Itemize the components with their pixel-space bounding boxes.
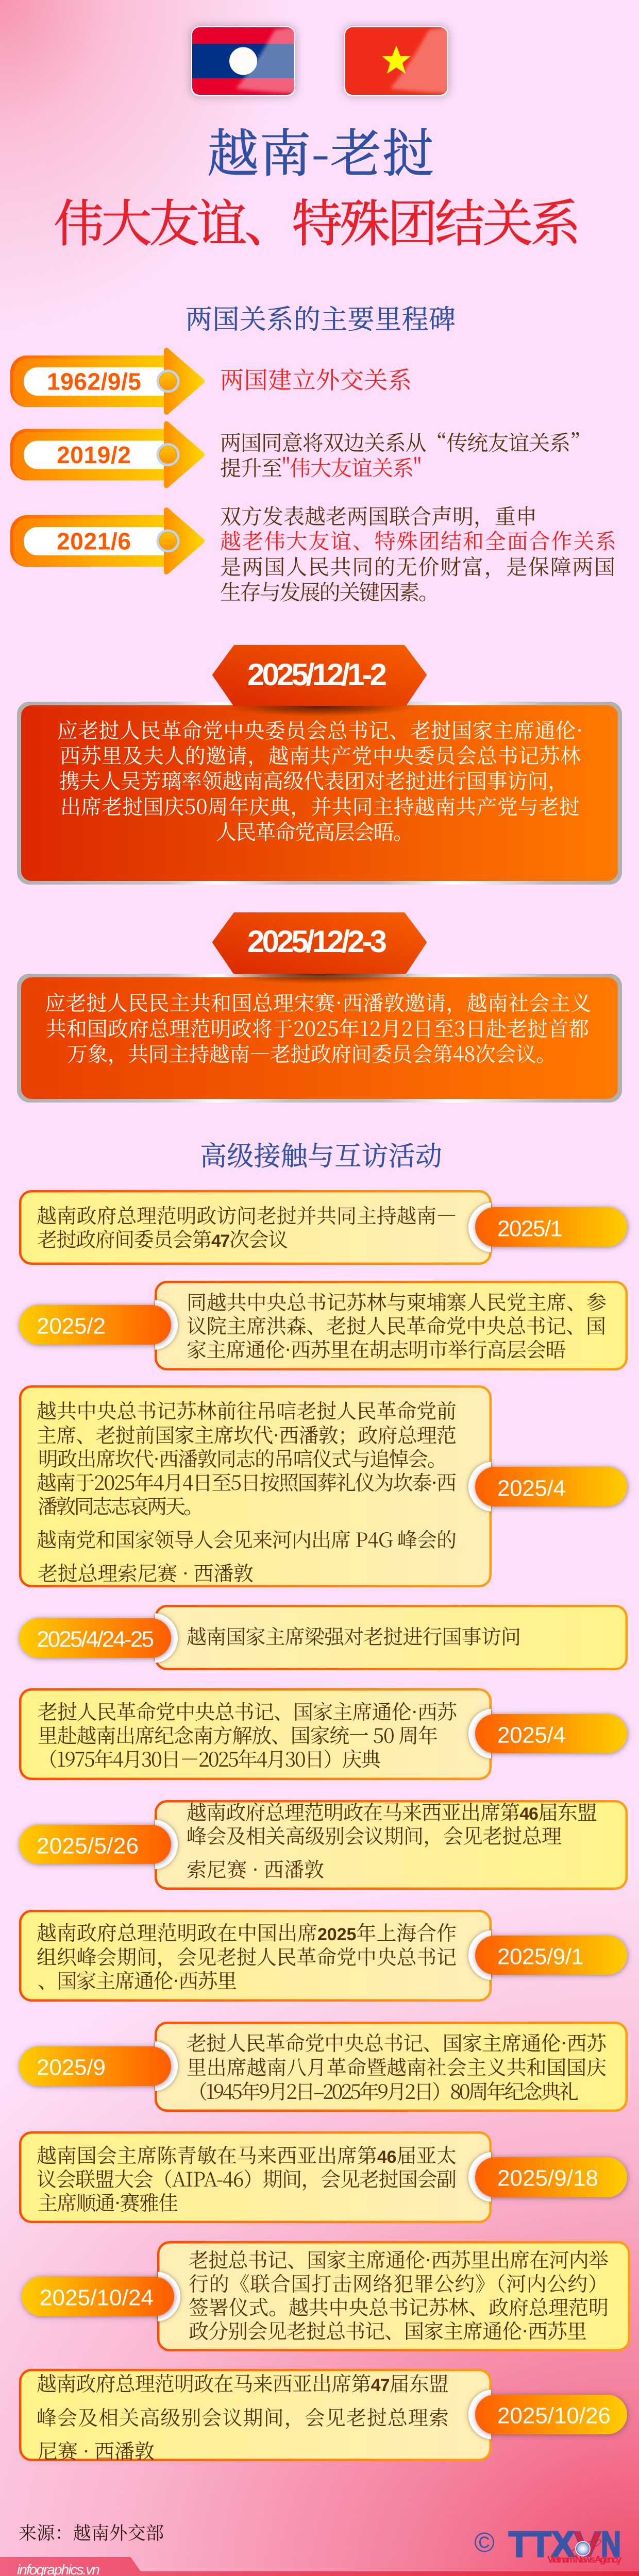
logo: TTXVN Vietnam News Agency: TTX	[509, 2524, 575, 2564]
event card: 2025/10/24: 行的《联合国打击网络犯罪公约》（河内公约）	[189, 2268, 608, 2297]
milestone text: 2021/6	[220, 500, 616, 606]
panel text: 2025/12/1-2: 人民革命党高层会晤。	[216, 816, 414, 845]
logo: TTXVN Vietnam News Agency: N	[601, 2524, 621, 2564]
panel text: 2025/12/2-3: 万象，共同主持越南—老挝政府间委员会第48次会议。	[67, 1038, 557, 1067]
event card: 2025/1: 老挝政府间委员会第47次会议	[37, 1224, 288, 1253]
event card: 2025/4 liberation anniversary: 老挝人民革命党中央总书记、国家主席通伦·西苏	[38, 1697, 458, 1725]
panel: 2025/12/1-2 state visit	[17, 646, 622, 885]
date pill: 2025/4	[475, 1467, 627, 1506]
event card: 2025/4 condolences: 潘敦同志志哀两天。	[38, 1491, 204, 1520]
milestone text: 2019/2: 两国同意将双边关系从“传统友谊关系”	[220, 426, 591, 456]
source note: 来源：越南外交部	[19, 2519, 164, 2545]
event card: 2025/4 liberation anniversary: 里赴越南出席纪念南方解放、国家统一 50 周年	[38, 1720, 438, 1749]
event card: 2025/9: 老挝人民革命党中央总书记、国家主席通伦·西苏	[187, 2028, 607, 2057]
date pill: 2025/4: 2025/4	[497, 1476, 566, 1501]
date pill: 2025/4/24-25: 2025/4/24-25	[37, 1627, 154, 1652]
event card: 2025/9/1: 越南政府总理范明政在中国出席2025年上海合作	[37, 1918, 457, 1946]
date badge: 2025/12/2-3	[213, 913, 426, 973]
event card: 2025/9/18: 主席顺通·赛雅佳	[38, 2188, 178, 2216]
date badge: 2025/12/2-3: 2025/12/2-3	[247, 924, 387, 959]
date pill: 2025/9/18	[475, 2157, 627, 2197]
panel text: 2025/12/2-3: 共和国政府总理范明政将于2025年12月2日至3日赴老挝首都	[46, 1013, 589, 1042]
event card: 2025/2: 同越共中央总书记苏林与柬埔寨人民党主席、参	[187, 1287, 607, 1316]
event card: 2025/9/1	[20, 1911, 627, 2001]
date pill: 2025/9/18: 2025/9/18	[497, 2166, 598, 2191]
icon: Vietnam flag	[344, 26, 452, 96]
event card: 2025/9/18: 议会联盟大会（AIPA-46）期间，会见老挝国会副	[37, 2164, 457, 2193]
event card: 2025/4/24-25	[19, 1606, 627, 1669]
event card: 2025/5/26: 越南政府总理范明政在马来西亚出席第46届东盟	[187, 1797, 597, 1826]
date pill: 2025/4 second	[475, 1714, 627, 1753]
event card: 2025/1: 越南政府总理范明政访问老挝并共同主持越南—	[37, 1200, 457, 1229]
milestone arrow: 2021/6	[10, 510, 202, 572]
event card: 2025/9/18	[20, 2132, 627, 2222]
event card: 2025/9	[19, 2023, 627, 2111]
event card: 2025/4 condolences	[20, 1386, 627, 1587]
panel text: 2025/12/1-2	[57, 715, 583, 845]
milestone arrow: 1962/9/5	[10, 350, 202, 412]
event card: 2025/10/24: 政分别会见老挝总书记、国家主席通伦·西苏里	[189, 2316, 587, 2345]
title: Vietnam-Laos: 越南-老挝	[207, 112, 434, 187]
panel: 2025/12/2-3 intergovernmental committee	[17, 913, 622, 1103]
date badge: 2025/12/1-2: 2025/12/1-2	[247, 657, 387, 692]
panel text: 2025/12/1-2: 应老挝人民革命党中央委员会总书记、老挝国家主席通伦·	[57, 715, 583, 744]
panel text: 2025/12/2-3: 应老挝人民民主共和国总理宋赛·西潘敦邀请，越南社会主义	[45, 987, 591, 1016]
date pill: 2025/10/24	[22, 2277, 174, 2316]
date pill: 2025/9	[19, 2046, 171, 2086]
panel text: 2025/12/1-2: 西苏里及夫人的邀请，越南共产党中央委员会总书记苏林	[60, 740, 581, 769]
event card: 2025/4 condolences: 越南于2025年4月4日至5日按照国葬礼仪为坎泰·西	[37, 1467, 457, 1496]
panel text: 2025/12/2-3	[45, 987, 591, 1067]
panel text: 2025/12/1-2: 出席老挝国庆50周年庆典，并共同主持越南共产党与老挝	[60, 791, 580, 820]
date pill: 2025/4/24-25	[19, 1618, 171, 1658]
logo: TTXVN Vietnam News Agency: V	[574, 2524, 601, 2564]
event card: 2025/9/1: 组织峰会期间，会见老挝人民革命党中央总书记	[37, 1942, 457, 1971]
event card: 2025/4 condolences: 越共中央总书记苏林前往吊唁老挝人民革命党前	[37, 1396, 457, 1425]
logo: TTXVN Vietnam News Agency: Vietnam News Agency	[547, 2554, 622, 2565]
milestone text: 2021/6: 双方发表越老两国联合声明，重申	[220, 500, 537, 530]
event card: 2025/4 liberation anniversary: （1975年4月30日－2025年4月30日）庆典	[38, 1744, 382, 1773]
event card: 2025/10/26: 越南政府总理范明政在马来西亚出席第47届东盟	[37, 2368, 449, 2397]
event card: 2025/9/18: 越南国会主席陈青敏在马来西亚出席第46届亚太	[37, 2140, 457, 2169]
event card: 2025/10/24: 老挝总书记、国家主席通伦·西苏里出席在河内举	[189, 2245, 609, 2274]
date pill: 2025/2	[19, 1305, 171, 1345]
event card: 2025/5/26	[19, 1797, 627, 1889]
date pill: 2025/9/1	[475, 1936, 627, 1975]
event card: 2025/10/26	[20, 2368, 627, 2465]
milestone text: 2019/2	[220, 426, 591, 482]
event card: 2025/9/1: 、国家主席通伦·西苏里	[38, 1965, 237, 1994]
event card: 2025/2: 家主席通伦·西苏里在胡志明市举行高层会晤	[187, 1334, 566, 1363]
event card: 2025/10/26: 尼赛 · 西潘敦	[38, 2436, 155, 2465]
date pill: 2025/5/26: 2025/5/26	[37, 1833, 139, 1859]
milestone arrow: 1962/9/5: 1962/9/5	[47, 368, 141, 395]
title: great friendship, special solidarity: 伟大友谊、特殊团结关系	[54, 183, 581, 256]
milestone arrow: 2019/2: 2019/2	[57, 442, 131, 468]
milestone arrow: 2019/2	[10, 423, 202, 485]
event card: 2025/9: （1945年9月2日–2025年9月2日）80周年纪念典礼	[188, 2076, 579, 2105]
event card: 2025/5/26: 索尼赛 · 西潘敦	[187, 1854, 324, 1883]
milestone text: 2021/6: 越老伟大友谊、特殊团结和全面合作关系	[220, 524, 616, 555]
date pill: 2025/10/24: 2025/10/24	[40, 2285, 154, 2310]
event card: 2025/4 condolences: 越南党和国家领导人会见来河内出席 P4G 峰会的	[37, 1524, 457, 1553]
event card: 2025/10/24: 签署仪式。越共中央总书记苏林、政府总理范明	[189, 2292, 609, 2321]
milestone arrow: 2021/6: 2021/6	[57, 528, 131, 554]
event card: 2025/2: 议院主席洪森、老挝人民革命党中央总书记、国	[187, 1311, 606, 1340]
event card: 2025/1	[20, 1191, 627, 1264]
event card: 2025/4/24-25: 越南国家主席梁强对老挝进行国事访问	[187, 1621, 521, 1650]
panel text: 2025/12/1-2: 携夫人吴芳璃率领越南高级代表团对老挝进行国事访问，	[59, 765, 568, 794]
milestone text: 1962/9/5: 两国建立外交关系	[220, 362, 412, 396]
event card: 2025/2	[19, 1282, 627, 1369]
milestone text: 2021/6: 生存与发展的关键因素。	[220, 575, 440, 606]
date pill: 2025/5/26	[19, 1825, 171, 1864]
event card: 2025/5/26: 峰会及相关高级别会议期间，会见老挝总理	[187, 1821, 562, 1850]
logo: TTXVN Vietnam News Agency	[474, 2524, 622, 2565]
event card: 2025/4 condolences: 老挝总理索尼赛 · 西潘敦	[38, 1558, 254, 1587]
milestone text: 2019/2: 提升至"伟大友谊关系"	[220, 451, 422, 482]
footer band	[0, 2557, 639, 2576]
icon: Laos flag	[191, 26, 299, 96]
date pill: 2025/9: 2025/9	[37, 2055, 106, 2080]
date badge: 2025/12/1-2	[213, 646, 426, 705]
milestone text: 2021/6: 是两国人民共同的无价财富，是保障两国	[220, 550, 615, 581]
date pill: 2025/9/1: 2025/9/1	[497, 1944, 584, 1969]
date pill: 2025/10/26	[475, 2395, 627, 2434]
event card: 2025/4 condolences: 主席、老挝前国家主席坎代·西潘敦；政府总理范	[37, 1420, 457, 1449]
date pill: 2025/4 second: 2025/4	[497, 1723, 566, 1748]
date pill: 2025/10/26: 2025/10/26	[497, 2403, 611, 2429]
event card: 2025/4 condolences: 明政出席坎代·西潘敦同志的吊唁仪式与追悼会。	[38, 1444, 447, 1472]
date pill: 2025/1: 2025/1	[497, 1216, 563, 1242]
event card: 2025/9: 里出席越南八月革命暨越南社会主义共和国国庆	[187, 2052, 607, 2081]
date pill: 2025/1	[475, 1207, 627, 1247]
heading: high-level contacts: 高级接触与互访活动	[200, 1134, 442, 1173]
date pill: 2025/2: 2025/2	[37, 1314, 106, 1338]
event card: 2025/10/24	[22, 2242, 629, 2350]
event card: 2025/10/26: 峰会及相关高级别会议期间，会见老挝总理索	[37, 2402, 449, 2431]
logo: TTXVN Vietnam News Agency: ©	[474, 2527, 495, 2558]
heading: milestones: 两国关系的主要里程碑	[186, 298, 456, 336]
event card: 2025/4 liberation anniversary	[20, 1689, 627, 1779]
